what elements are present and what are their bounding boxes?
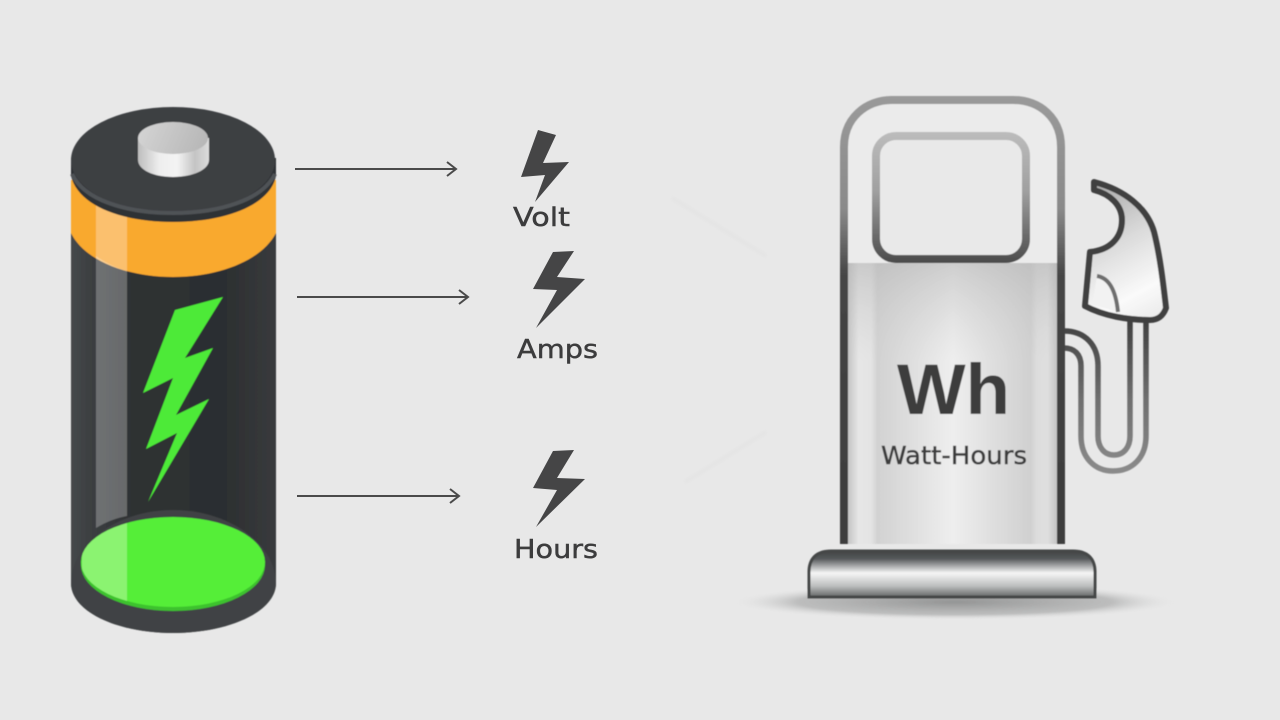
hours item: [514, 450, 598, 565]
battery base ring: [71, 510, 276, 633]
glass highlight: [96, 256, 127, 528]
battery terminal: [138, 122, 209, 177]
arrow: volt: [295, 162, 456, 176]
battery: [71, 107, 276, 633]
pump body: [844, 100, 1061, 544]
volt item: [513, 130, 570, 233]
faint arrow upper: [672, 198, 766, 256]
battery body: [71, 180, 276, 633]
label: hours: Hours: [514, 535, 598, 565]
green lightning bolt: [143, 297, 223, 502]
pump screen: [876, 136, 1026, 259]
hose: [1064, 318, 1146, 471]
label: amps: Amps: [517, 335, 598, 365]
arrow: amps: [297, 290, 468, 304]
pump base: [809, 551, 1095, 597]
orange band: [71, 180, 276, 277]
battery cap: [71, 107, 276, 222]
nozzle: [1085, 182, 1166, 320]
ground shadow: [730, 584, 1180, 620]
orange highlight: [95, 205, 128, 272]
watt-hours label: Watt-Hours: [881, 441, 1027, 470]
icon: volt bolt: [521, 130, 569, 202]
icon: amps bolt: [533, 251, 585, 328]
wh heading: Wh: [897, 351, 1010, 430]
arrow: hours: [297, 489, 459, 503]
infographic: [70, 96, 1170, 634]
icon: hours bolt: [533, 450, 585, 527]
label: volt: Volt: [513, 203, 570, 233]
faint arrow lower: [685, 432, 766, 482]
fuel pump: [730, 100, 1180, 620]
green charge level: [81, 517, 265, 611]
amps item: [517, 251, 598, 365]
